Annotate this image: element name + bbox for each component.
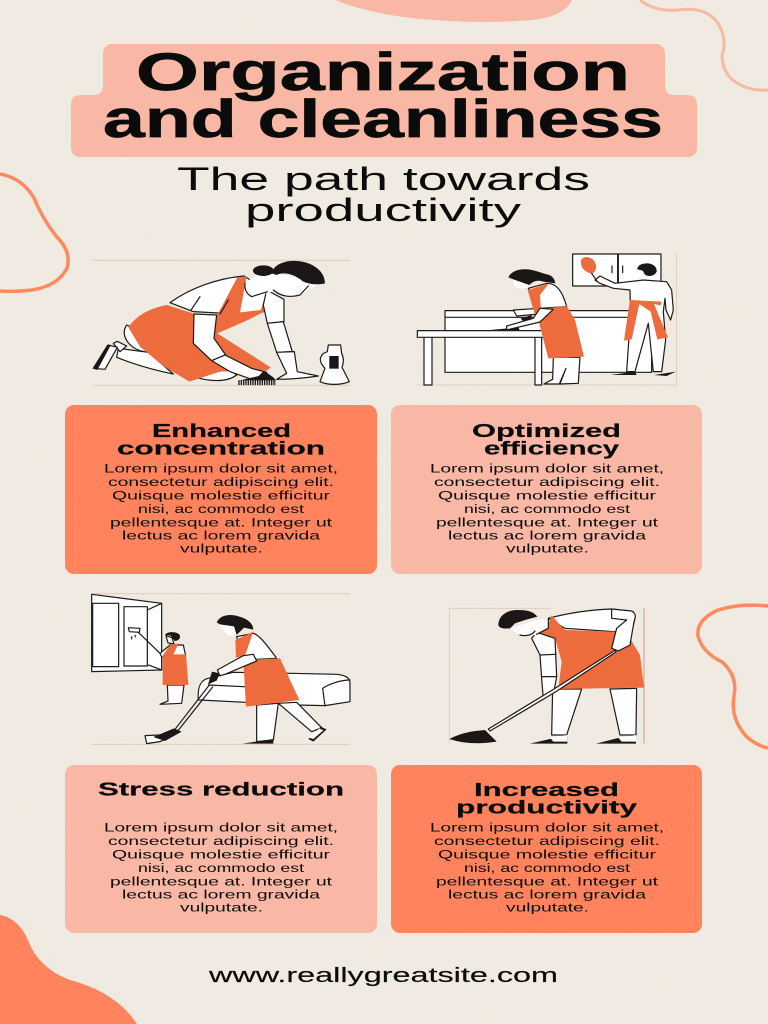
decor: bottom left blob <box>0 915 137 1024</box>
illustration: woman scrubbing floor <box>92 260 350 385</box>
card body text: nisi, ac commodo est <box>464 861 631 875</box>
card heading: Enhanced <box>152 421 291 441</box>
card body text: Quisque molestie efficitur <box>438 488 656 502</box>
card body text: Quisque molestie efficitur <box>112 848 330 862</box>
card heading <box>117 421 325 458</box>
subtitle <box>177 161 590 228</box>
card body text: Lorem ipsum dolor sit amet, <box>104 820 338 834</box>
card body text <box>104 820 338 914</box>
card heading: Increased <box>474 780 619 800</box>
card body text: Lorem ipsum dolor sit amet, <box>430 462 664 476</box>
footer url: www.reallygreatsite.com <box>207 965 558 987</box>
card body text: consectetur adipiscing elit. <box>434 475 660 489</box>
card body text <box>430 820 664 914</box>
decor: right curve <box>698 605 768 748</box>
illustration: couple cleaning kitchen <box>417 253 677 385</box>
card body text: consectetur adipiscing elit. <box>108 834 334 848</box>
illustration: woman vacuuming and man washing window <box>92 594 350 744</box>
card body text: lectus ac lorem gravida <box>448 528 646 542</box>
subtitle: The path towards <box>177 161 590 197</box>
card heading: concentration <box>117 438 325 458</box>
card heading: Optimized <box>472 421 621 441</box>
card body text: consectetur adipiscing elit. <box>434 834 660 848</box>
card body text: nisi, ac commodo est <box>138 861 305 875</box>
subtitle: productivity <box>245 192 521 228</box>
card body text: vulputate. <box>180 542 263 556</box>
card body text: vulputate. <box>506 900 589 914</box>
title: and cleanliness <box>103 90 663 149</box>
card body text: lectus ac lorem gravida <box>122 528 320 542</box>
card: stress reduction <box>65 765 377 933</box>
card body text: pellentesque at. Integer ut <box>110 874 333 888</box>
card heading: productivity <box>456 798 637 818</box>
card body text: lectus ac lorem gravida <box>448 888 646 902</box>
card heading: Stress reduction <box>98 780 344 800</box>
card body text <box>430 462 664 556</box>
card body text: nisi, ac commodo est <box>464 502 631 516</box>
card body text: Lorem ipsum dolor sit amet, <box>430 820 664 834</box>
card body text: pellentesque at. Integer ut <box>436 516 659 530</box>
card heading <box>472 421 621 458</box>
title panel <box>71 44 697 157</box>
card body text: Quisque molestie efficitur <box>112 488 330 502</box>
title: Organization <box>136 43 630 102</box>
decor: top right curve <box>640 0 768 90</box>
card: optimized efficiency <box>391 405 702 574</box>
illustration: woman sweeping <box>449 608 644 744</box>
card body text <box>104 462 338 556</box>
card body text: pellentesque at. Integer ut <box>436 874 659 888</box>
card heading <box>456 780 637 818</box>
decor: top blob <box>335 0 572 22</box>
card body text: vulputate. <box>506 542 589 556</box>
card body text: Lorem ipsum dolor sit amet, <box>104 462 338 476</box>
card: enhanced concentration <box>65 405 377 574</box>
title <box>103 43 663 149</box>
card heading: efficiency <box>484 438 619 458</box>
decor: left curve <box>0 174 68 291</box>
card body text: Quisque molestie efficitur <box>438 848 656 862</box>
card body text: vulputate. <box>180 900 263 914</box>
card body text: pellentesque at. Integer ut <box>110 516 333 530</box>
card body text: lectus ac lorem gravida <box>122 888 320 902</box>
card: increased productivity <box>391 765 702 933</box>
card body text: nisi, ac commodo est <box>138 502 305 516</box>
card body text: consectetur adipiscing elit. <box>108 475 334 489</box>
